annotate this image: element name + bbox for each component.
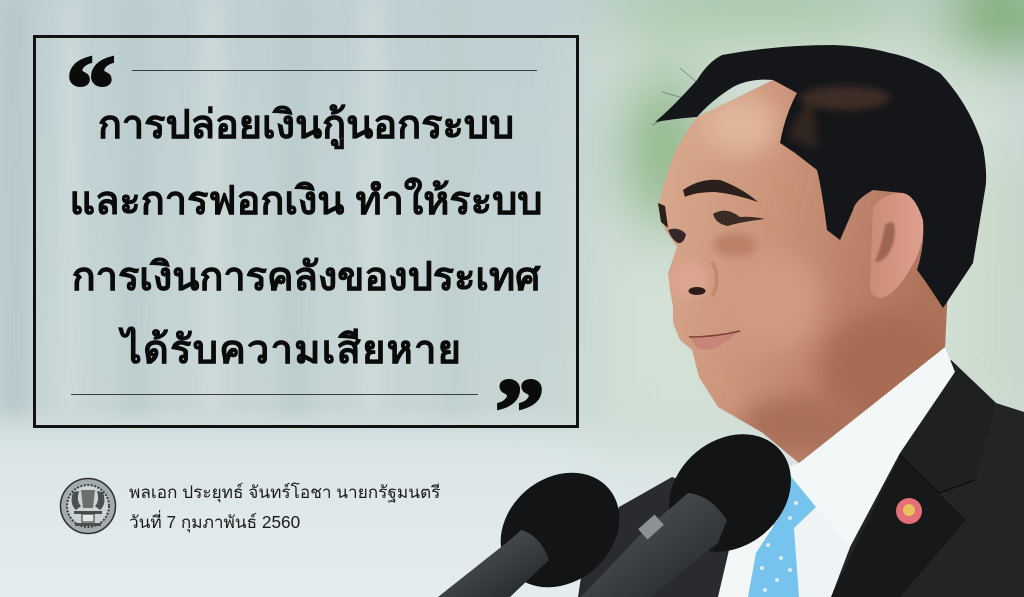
- speaker: eyes and brows: [658, 180, 765, 243]
- top rule: [132, 70, 537, 71]
- blurred foliage: [590, 0, 1024, 450]
- quote line 4: ได้รับความเสียหาย: [122, 328, 462, 372]
- icon: government seal: [60, 478, 116, 534]
- speaker: jacket: [800, 360, 1024, 597]
- signature text: [129, 482, 440, 532]
- speaker: hair: [652, 45, 986, 308]
- bottom rule: [71, 394, 478, 395]
- microphone: left: [438, 449, 642, 597]
- quote line 3: การเงินการคลังของประเทศ: [72, 255, 540, 299]
- blurred window columns: [0, 0, 470, 415]
- speaker: neck: [745, 290, 946, 463]
- speaker: lapels: [831, 455, 966, 597]
- speaker: tie: [748, 473, 816, 597]
- face shading: [672, 95, 960, 455]
- date: วันที่ 7 กุมภาพันธ์ 2560: [129, 512, 300, 532]
- closing quote mark: ”: [494, 360, 544, 462]
- quote line 2: และการฟอกเงิน ทำให้ระบบ: [70, 179, 542, 223]
- thinning hair patch: [800, 86, 890, 110]
- speaker: ear: [870, 193, 923, 298]
- quote box: [33, 35, 579, 428]
- microphone: right: [581, 410, 815, 597]
- speaker name: พลเอก ประยุทธ์ จันทร์โอชา นายกรัฐมนตรี: [129, 482, 440, 502]
- speaker: lapel pin: [896, 498, 922, 524]
- speaker: shirt: [718, 347, 955, 597]
- quote line 1: การปล่อยเงินกู้นอกระบบ: [98, 103, 514, 147]
- speaker: nose and mouth: [688, 287, 740, 350]
- opening quote mark: “: [66, 36, 115, 138]
- speaker: face: [658, 80, 950, 463]
